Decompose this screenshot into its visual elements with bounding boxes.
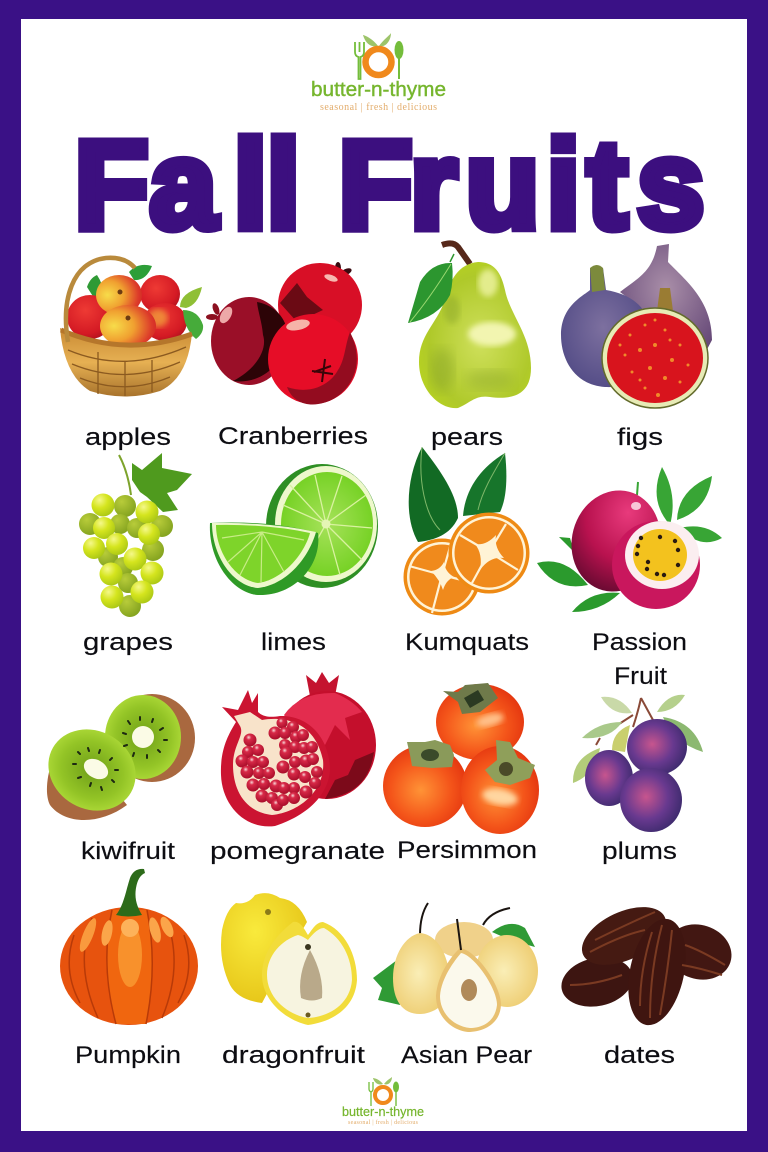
fruit: apples bbox=[60, 258, 203, 396]
label: Pumpkin: Pumpkin bbox=[75, 1042, 181, 1069]
label: figs: figs bbox=[617, 424, 663, 451]
fruit: plums bbox=[573, 695, 703, 832]
fruit: limes bbox=[210, 464, 378, 595]
label: dragonfruit: dragonfruit bbox=[222, 1042, 365, 1069]
label: Asian Pear: Asian Pear bbox=[401, 1042, 532, 1069]
fruit: pear bbox=[408, 243, 531, 408]
logo: butter-n-thyme bottom: seasonal | fresh | delicious bbox=[348, 1119, 419, 1126]
fruit: figs bbox=[561, 244, 712, 408]
logo: butter-n-thyme top bbox=[311, 33, 446, 113]
label: Persimmon: Persimmon bbox=[397, 837, 537, 864]
label: pomegranate: pomegranate bbox=[210, 838, 385, 865]
logo: butter-n-thyme bottom bbox=[342, 1077, 424, 1126]
label: grapes: grapes bbox=[83, 629, 173, 656]
label: dates: dates bbox=[604, 1042, 675, 1069]
fruit: pumpkin bbox=[60, 869, 198, 1025]
fruit: kiwifruit bbox=[34, 694, 195, 826]
label: Passion Fruit bbox=[592, 629, 687, 690]
fruit: Asian pear bbox=[373, 903, 538, 1032]
label: limes: limes bbox=[261, 629, 326, 656]
label: Passion Fruit: Passion bbox=[592, 629, 687, 656]
logo: butter-n-thyme bottom: butter-n-thyme bbox=[342, 1105, 424, 1119]
fruit: passion fruit bbox=[537, 467, 722, 612]
fruit: persimmons bbox=[383, 683, 539, 834]
fruit: dates bbox=[557, 895, 739, 1030]
fruit: dragonfruit (quince) bbox=[221, 893, 357, 1025]
logo: butter-n-thyme top: seasonal | fresh | delicious bbox=[320, 102, 437, 113]
label: plums: plums bbox=[602, 838, 677, 865]
label: Cranberries: Cranberries bbox=[218, 423, 368, 450]
label: pears: pears bbox=[431, 424, 503, 451]
label: apples: apples bbox=[85, 424, 171, 451]
label: kiwifruit: kiwifruit bbox=[81, 838, 175, 865]
fruit: grapes bbox=[79, 453, 192, 617]
title: Fall Fruits bbox=[74, 116, 704, 255]
label: Kumquats: Kumquats bbox=[405, 629, 529, 656]
label: Passion Fruit: Fruit bbox=[614, 663, 667, 690]
fruit: kumquats bbox=[404, 447, 530, 616]
fruit: cranberries bbox=[206, 262, 362, 404]
logo: butter-n-thyme top: butter-n-thyme bbox=[311, 79, 446, 101]
fruit: pomegranate bbox=[221, 672, 376, 826]
